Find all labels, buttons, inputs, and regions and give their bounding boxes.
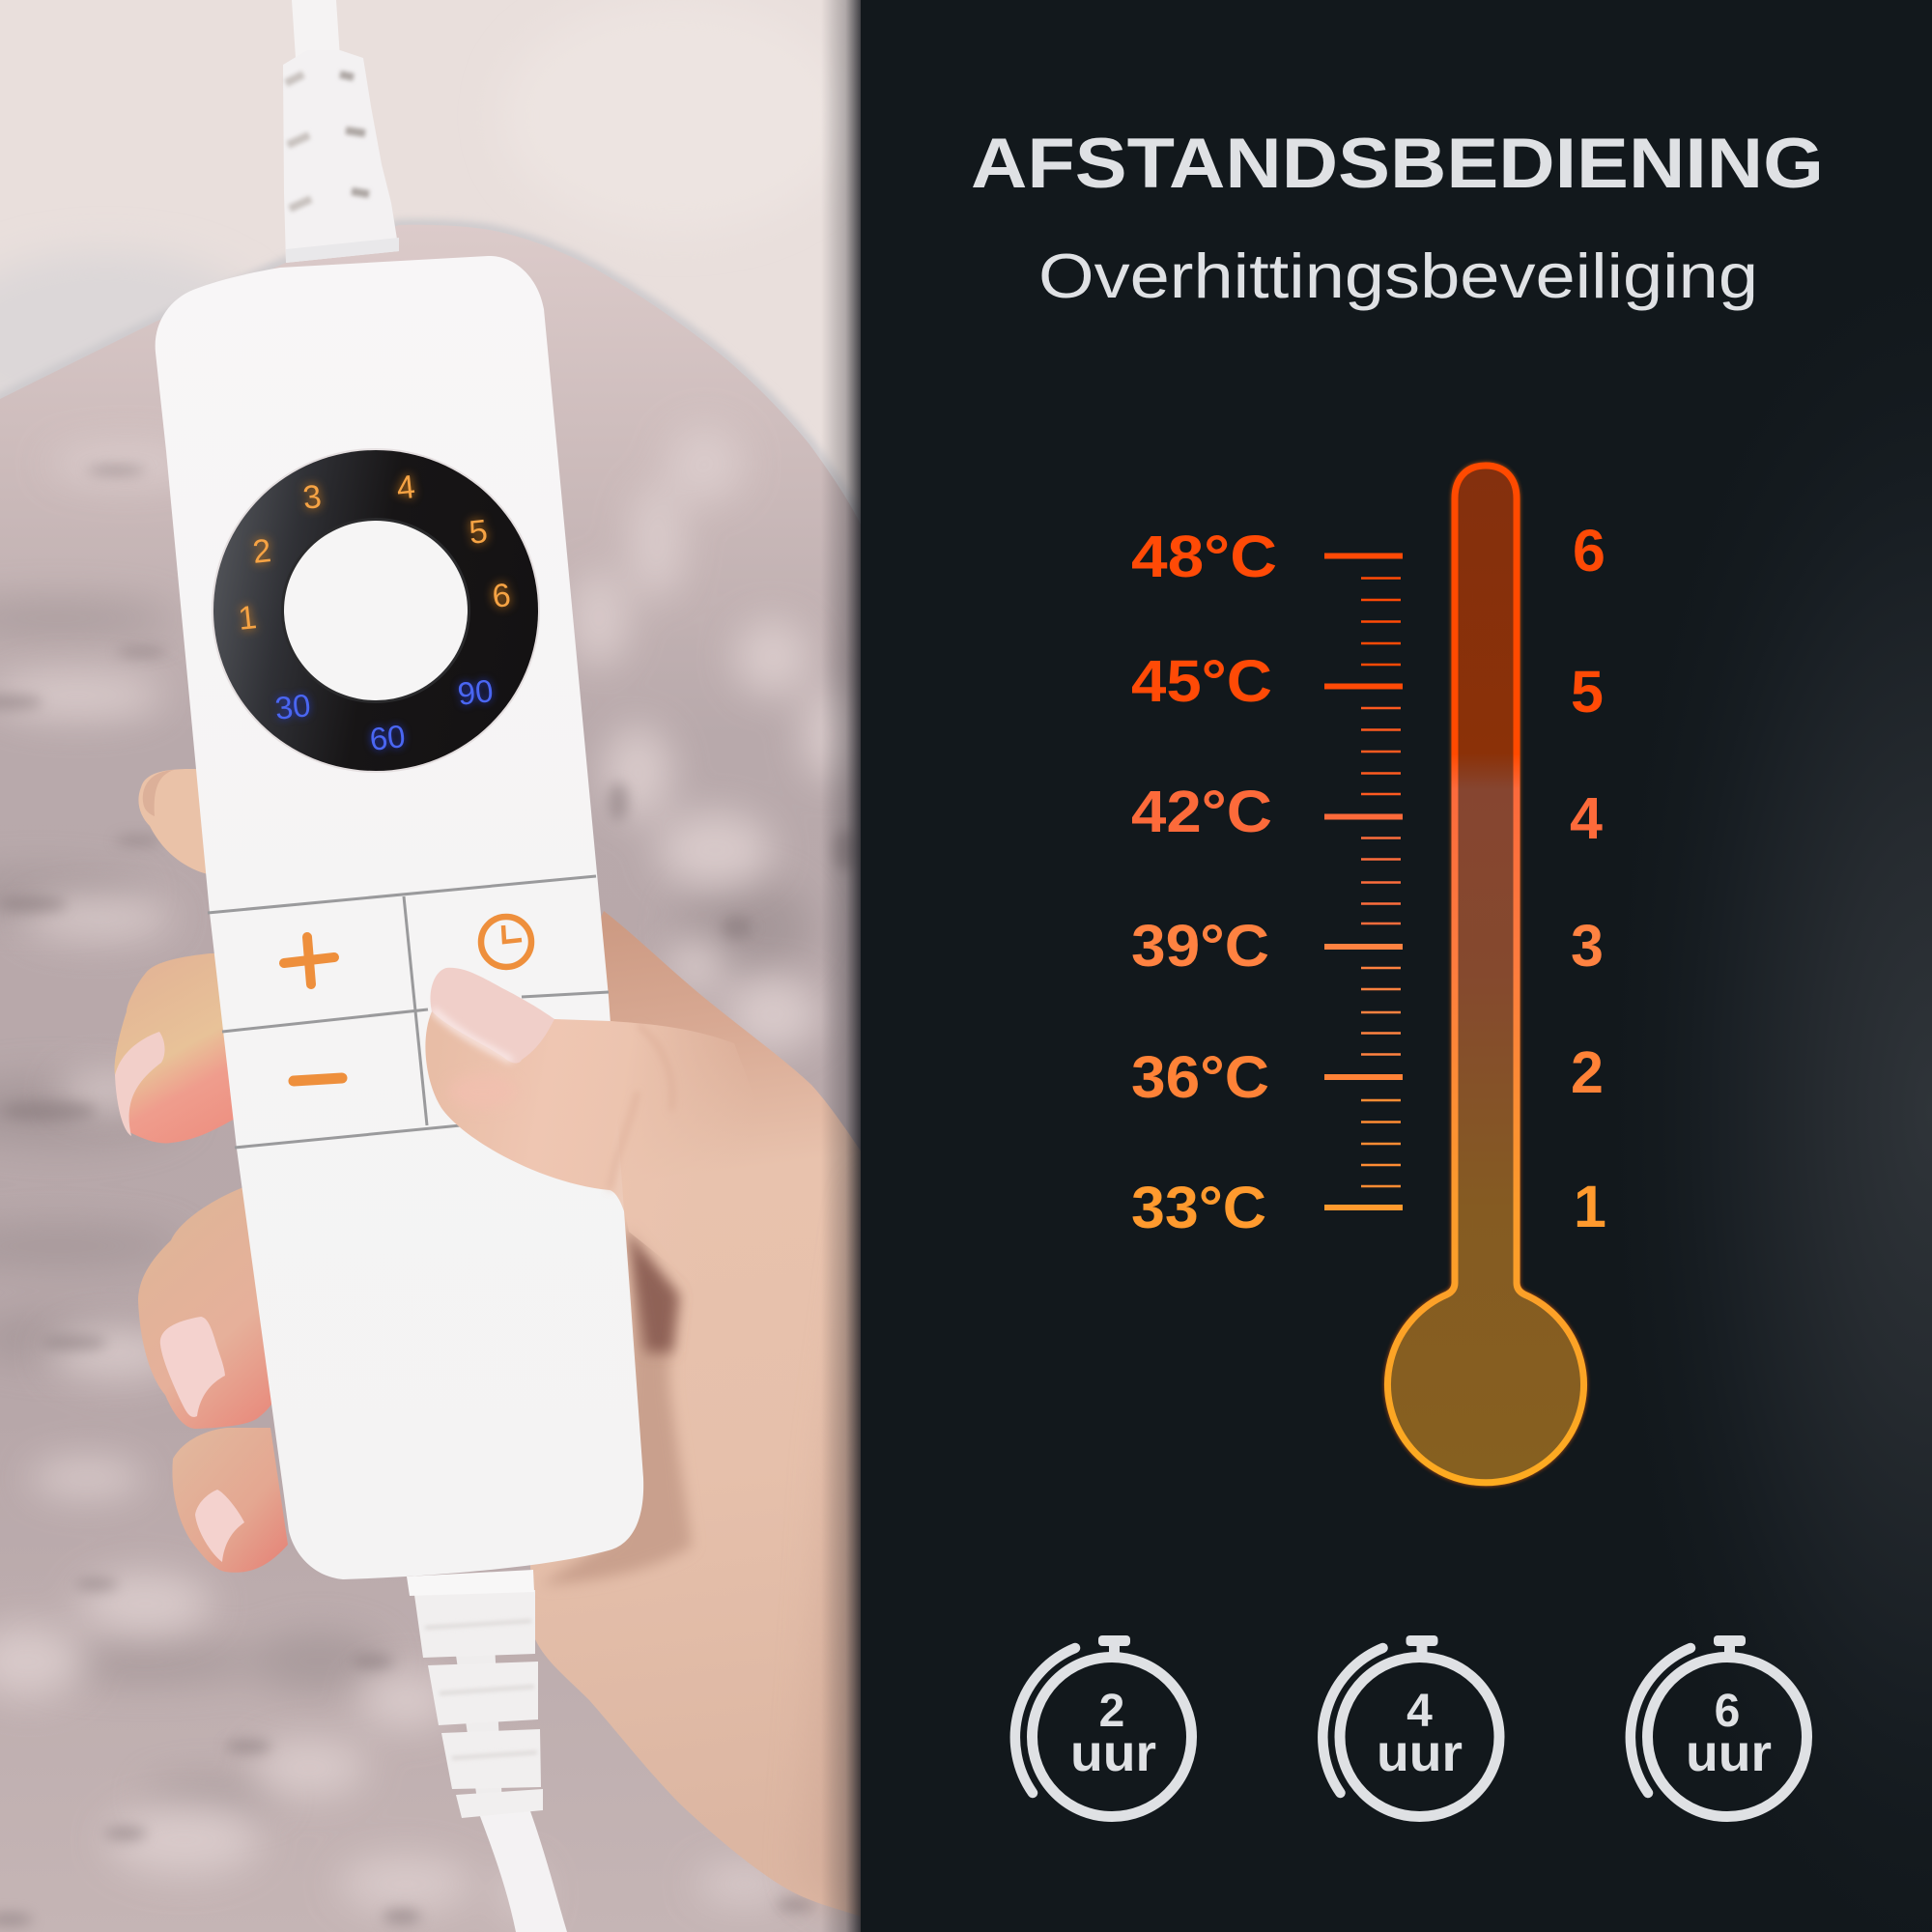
photo panel — [0, 0, 869, 1932]
panel edge shadow — [821, 0, 862, 1932]
heat level digits: 6 — [491, 577, 512, 615]
timer icon: 4 uur — [1322, 1635, 1499, 1816]
palm and back of hand — [522, 911, 869, 1922]
heat level digits: 1 — [237, 599, 258, 638]
pad dark dimples — [0, 466, 857, 1926]
backdrop — [0, 0, 861, 518]
top cable and strain relief — [283, 0, 399, 263]
button divider lines — [208, 876, 609, 1148]
temperature labels: 45°C — [1131, 648, 1272, 714]
dark panel — [861, 0, 1932, 1932]
timer icon: 2 uur — [1015, 1635, 1192, 1816]
temperature scale ticks — [1324, 556, 1403, 1208]
temperature labels: 33°C — [1131, 1175, 1266, 1240]
temperature labels: 36°C — [1131, 1044, 1269, 1110]
thumb — [425, 968, 763, 1285]
heat level digits — [237, 469, 512, 638]
icon: minus — [294, 1078, 342, 1081]
timer icon: 4 uur: 4 — [1406, 1686, 1433, 1737]
timer icon: 6 uur: 6 — [1715, 1686, 1740, 1737]
icon: plus — [284, 937, 334, 984]
heat level digits: 3 — [301, 478, 323, 517]
finger 4 — [172, 1428, 288, 1573]
timer icon: 2 uur: 2 — [1099, 1686, 1124, 1737]
pad soft dark bands — [0, 601, 811, 1814]
temperature labels: 48°C — [1131, 524, 1277, 589]
remote control body — [156, 256, 643, 1579]
icon: clock — [481, 917, 531, 967]
fingers behind remote — [115, 769, 288, 1573]
timer digits: 90 — [456, 672, 495, 712]
heat level digits: 5 — [468, 513, 489, 552]
finger 2 — [115, 953, 237, 1143]
bottom cable and strain relief — [407, 1570, 567, 1932]
level numbers: 1 — [1574, 1174, 1606, 1239]
level numbers: 2 — [1571, 1039, 1604, 1105]
heat level digits: 4 — [395, 469, 416, 507]
timer icon: 2 uur: uur — [1070, 1724, 1156, 1782]
timer digits: 30 — [273, 687, 312, 726]
finger 1 — [138, 769, 207, 873]
relief ribs — [414, 1590, 543, 1818]
thermometer — [1387, 466, 1584, 1483]
subtitle: Overhittingsbeveiliging — [1038, 241, 1758, 311]
temperature labels — [1131, 524, 1277, 1240]
level numbers: 5 — [1571, 659, 1604, 724]
pad light blotches — [0, 425, 860, 1922]
level numbers: 6 — [1573, 518, 1605, 583]
level numbers — [1570, 518, 1606, 1239]
level numbers: 4 — [1570, 785, 1603, 851]
timer icon: 4 uur: uur — [1377, 1724, 1463, 1782]
heat level digits: 2 — [251, 532, 272, 571]
relief neck — [454, 1642, 502, 1806]
heating pad — [0, 225, 862, 1932]
thumbnail — [430, 968, 554, 1064]
timer icon: 6 uur: uur — [1686, 1724, 1772, 1782]
timer icon: 6 uur — [1631, 1635, 1806, 1816]
timer digits: 60 — [368, 718, 407, 757]
level numbers: 3 — [1571, 913, 1604, 979]
finger 3 — [138, 1184, 281, 1429]
title: AFSTANDSBEDIENING — [971, 125, 1824, 203]
timer digits — [273, 672, 495, 757]
dial ring — [212, 448, 540, 773]
temperature labels: 42°C — [1131, 779, 1272, 844]
temperature labels: 39°C — [1131, 913, 1269, 979]
